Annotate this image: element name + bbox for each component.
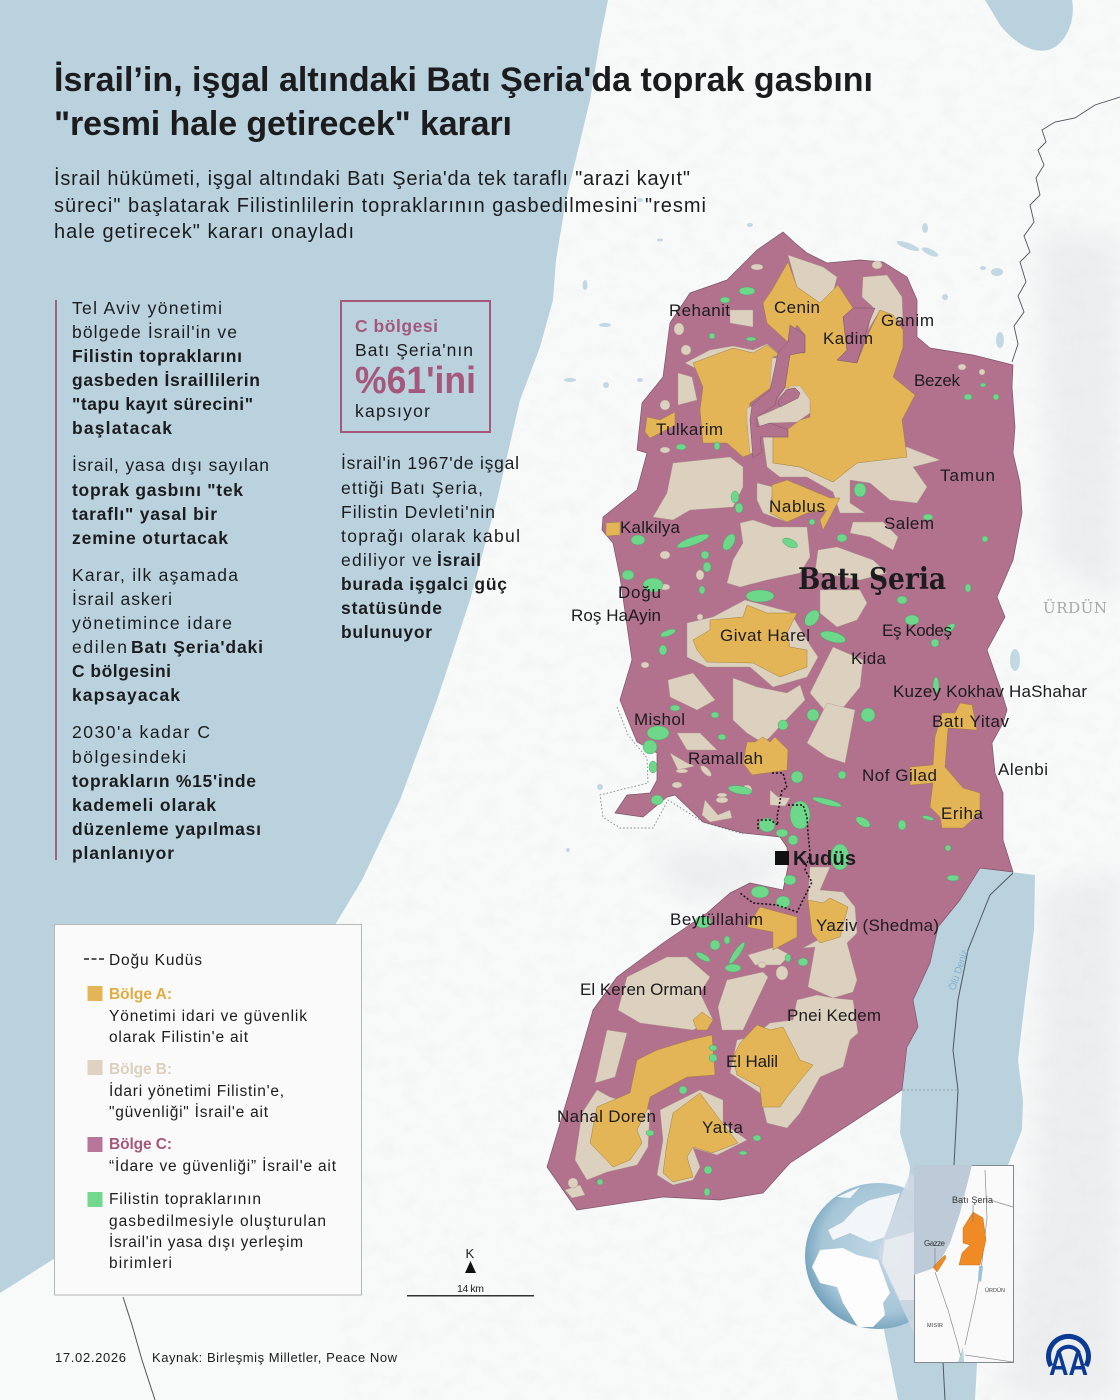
left column text: planlanıyor (72, 843, 174, 863)
title: "resmi hale getirecek" kararı (54, 105, 512, 143)
map labels: Pnei Kedem (787, 1006, 881, 1025)
legend: Doğu Kudüs: Doğu Kudüs (109, 952, 202, 969)
inset map: Gazze (924, 1239, 946, 1248)
callout: C bölgesi: C bölgesi (355, 316, 438, 336)
Area C (547, 232, 1022, 1210)
map labels: Batı Yitav (932, 712, 1010, 731)
callout: C bölgesi (341, 301, 490, 432)
map labels: Ganim (881, 311, 934, 330)
map labels: Kadim (823, 329, 873, 348)
inset map: Batı Şeria (952, 1195, 993, 1205)
legend: Bölge B (88, 1060, 284, 1121)
Area B ring around the corridor (747, 358, 810, 453)
left column text: taraflı" yasal bir (72, 504, 217, 524)
callout: C bölgesi: kapsıyor (355, 401, 430, 421)
legend: settlements (88, 1191, 326, 1272)
left column text: toprak gasbını "tek (72, 480, 243, 500)
left column accent bar (55, 300, 57, 860)
legend: settlements: İsrail'in yasa dışı yerleşim (109, 1233, 303, 1251)
callout: C bölgesi: %61'ini (355, 360, 476, 402)
callout: C bölgesi: Batı Şeria'nın (355, 340, 473, 360)
AA logo: AA (1049, 1346, 1088, 1382)
legend: settlements: Filistin topraklarının (109, 1191, 261, 1208)
left column text: Tel Aviv yönetimi (72, 298, 222, 318)
legend: settlements: gasbedilmesiyle oluşturulan (109, 1213, 326, 1230)
left column text: Batı Şeria'daki (131, 637, 263, 657)
Area C corridor channels (750, 308, 875, 458)
left column text: edilen (72, 637, 127, 657)
scale and north arrow: K (466, 1246, 474, 1261)
map labels: Batı Şeria (798, 562, 946, 597)
left column text: kapsayacak (72, 685, 180, 705)
left column text: 2030'a kadar C (72, 722, 210, 742)
title (54, 61, 873, 143)
Sea of Galilee (985, 0, 1073, 51)
Area B (565, 255, 985, 1198)
ponds (564, 198, 1020, 852)
sea (0, 0, 608, 1293)
map labels: Salem (884, 514, 934, 533)
legend: Bölge C (88, 1136, 337, 1175)
legend: Bölge B: İdari yönetimi Filistin'e, (109, 1082, 284, 1100)
left column text (72, 298, 269, 863)
left column text: kademeli olarak (72, 795, 216, 815)
legend: Bölge B: Bölge B: (109, 1061, 172, 1078)
map labels: Doğu (618, 583, 661, 602)
footer source: Kaynak: Birleşmiş Milletler, Peace Now (152, 1350, 398, 1365)
Dead Sea (884, 868, 1035, 1400)
map labels: ÜRDÜN (1043, 599, 1107, 617)
left column text: başlatacak (72, 418, 172, 438)
Egypt border (123, 1297, 155, 1400)
middle text: toprağı olarak kabul (341, 526, 520, 546)
map labels: Beytüllahim (670, 910, 763, 929)
left column text: zemine oturtacak (72, 528, 228, 548)
map labels: Givat Harel (720, 626, 810, 645)
map labels: Nof Gilad (862, 766, 937, 785)
scale and north arrow (407, 1246, 534, 1296)
no man's land dotted boundary (600, 707, 743, 834)
inset map (914, 1165, 1014, 1362)
left column text: İsrail askeri (72, 589, 172, 609)
map labels: Yatta (702, 1118, 744, 1137)
legend: settlements: birimleri (109, 1255, 172, 1272)
middle text: İsrail'in 1967'de işgal (341, 453, 519, 473)
globe (805, 1183, 909, 1329)
subtitle (54, 167, 706, 243)
inset cone (878, 1173, 914, 1333)
middle text: statüsünde (341, 598, 442, 618)
left column text: yönetimince idare (72, 613, 232, 633)
middle text: burada işgalci güç (341, 574, 507, 594)
map labels: Nahal Doren (557, 1107, 656, 1126)
legend (54, 924, 362, 1295)
Area A (590, 262, 980, 1182)
legend: Bölge B: "güvenliği" İsrail'e ait (109, 1103, 269, 1121)
left column text: İsrail, yasa dışı sayılan (72, 455, 269, 475)
legend: Bölge A: Bölge A: (109, 986, 172, 1003)
legend: Bölge A: olarak Filistin'e ait (109, 1029, 249, 1046)
map labels: Tulkarim (656, 420, 723, 439)
map labels: El Keren Ormanı (580, 980, 707, 999)
East Jerusalem dotted boundary (740, 773, 812, 912)
title: İsrail’in, işgal altındaki Batı Şeria'da toprak gasbını (54, 61, 873, 99)
middle text: Filistin Devleti'nin (341, 502, 495, 522)
left column text: bölgede İsrail'in ve (72, 322, 237, 342)
legend: Bölge A (88, 986, 307, 1046)
legend: Bölge A: Yönetimi idari ve güvenlik (109, 1008, 307, 1025)
map labels (557, 298, 1107, 1137)
middle text: ettiği Batı Şeria, (341, 478, 483, 498)
map labels: Roş HaAyin (571, 606, 661, 625)
middle text: İsrail (437, 550, 481, 570)
middle text (341, 453, 520, 642)
subtitle: süreci" başlatarak Filistinlilerin topraklarının gasbedilmesini "resmi (54, 195, 706, 217)
AA logo (1048, 1336, 1089, 1382)
map labels: Ölü Deniz (946, 948, 971, 992)
middle text: bulunuyor (341, 622, 432, 642)
inset sea (914, 1165, 972, 1275)
subtitle: hale getirecek" kararı onayladı (54, 221, 354, 243)
map labels: Bezek (914, 371, 960, 390)
map labels: El Halil (726, 1052, 778, 1071)
map labels: Rehanit (669, 301, 730, 320)
middle text: ediliyor ve (341, 550, 432, 570)
inset Gaza (933, 1255, 946, 1272)
highlands shading (660, 230, 1120, 1400)
left column text: düzenleme yapılması (72, 819, 261, 839)
map: West Bank areas (547, 232, 1022, 1210)
terrain texture (340, 0, 1120, 1400)
marker: Kudüs (775, 851, 789, 865)
footer date: 17.02.2026 (55, 1350, 126, 1365)
subtitle: İsrail hükümeti, işgal altındaki Batı Şeria'da tek taraflı "arazi kayıt" (54, 167, 690, 190)
map labels: Kudüs (793, 848, 856, 870)
map labels: Nablus (769, 497, 825, 516)
Israeli settlements (green) (597, 287, 999, 1196)
map labels: Tamun (940, 466, 995, 485)
map labels: Kalkilya (620, 518, 681, 537)
map labels: Ramallah (688, 749, 763, 768)
left column text: bölgesindeki (72, 747, 186, 767)
inset West Bank (959, 1212, 986, 1265)
legend: Bölge C: “İdare ve güvenliği” İsrail'e ait (109, 1157, 337, 1175)
map labels: Yaziv (Shedma) (816, 916, 939, 935)
Jordan border line (1012, 97, 1120, 362)
inset map: MISIR (927, 1323, 943, 1329)
map labels: Kuzey Kokhav HaShahar (893, 682, 1087, 701)
scale and north arrow: 14 km (457, 1283, 484, 1295)
left column text: toprakların %15'inde (72, 771, 256, 791)
map labels: Kida (851, 649, 887, 668)
map labels: Alenbi (998, 760, 1048, 779)
map labels: Mishol (634, 710, 685, 729)
map labels: Eriha (941, 804, 984, 823)
left column text: C bölgesini (72, 661, 171, 681)
left column text: gasbeden İsraillilerin (72, 370, 260, 390)
map labels: Cenin (774, 298, 820, 317)
left column text: Filistin topraklarını (72, 346, 242, 366)
map labels: Eş Kodeş (882, 621, 952, 640)
left column text: "tapu kayıt sürecini" (72, 394, 253, 414)
Dead Sea border lines (943, 873, 1013, 1400)
legend: Bölge C: Bölge C: (109, 1136, 172, 1153)
left column text: Karar, ilk aşamada (72, 565, 238, 585)
inset map: ÜRDÜN (985, 1287, 1005, 1294)
